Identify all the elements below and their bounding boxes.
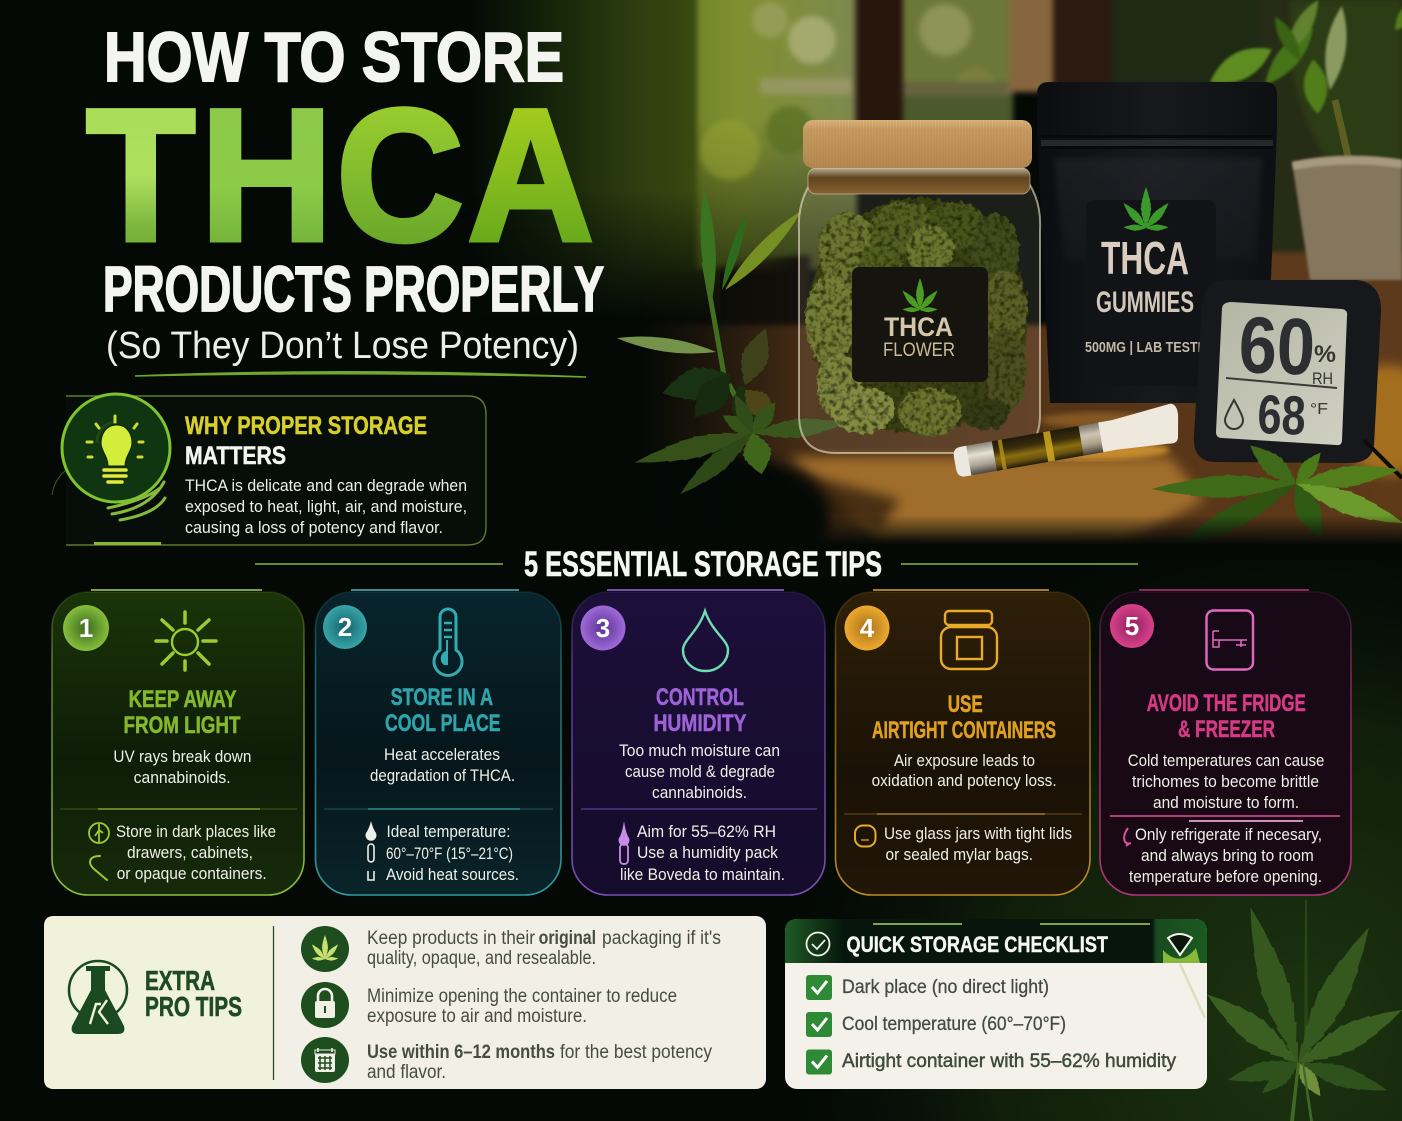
icon: sun (156, 612, 216, 670)
panel: why proper storage matters (52, 394, 486, 545)
heading (385, 684, 500, 737)
storage advice: drawers, cabinets, (127, 843, 253, 862)
heading: KEEP AWAY (129, 686, 237, 713)
panel: tip 4 use airtight containers (836, 590, 1090, 895)
jar label: FLOWER (883, 340, 955, 361)
tip: use within 6-12 months (301, 1037, 712, 1083)
tip: original packaging: Keep products in their (367, 928, 536, 949)
description: degradation of THCA. (370, 766, 515, 785)
check item: dark place (806, 975, 1049, 1000)
storage advice: Store in dark places like (116, 822, 276, 841)
icon: check circle (806, 932, 830, 956)
panel: tip 1 keep away from light (52, 590, 304, 895)
hygrometer: 60% RH, 68°F: % (1314, 341, 1336, 368)
check item: airtight container: Airtight container with 55–62% humidity (842, 1051, 1176, 1072)
foreground cannabis leaf on table (1151, 437, 1402, 560)
number badge 2: 2 (338, 612, 352, 642)
heading: & FREEZER (1178, 716, 1275, 743)
storage advice: Only refrigerate if necesary, (1135, 825, 1322, 844)
heading: AVOID THE FRIDGE (1147, 690, 1306, 717)
description: Too much moisture can (619, 741, 780, 760)
number badge 3: 3 (596, 613, 610, 643)
description (370, 745, 515, 785)
icon: fridge (1206, 610, 1253, 670)
icon: temperature markers (366, 821, 376, 880)
storage advice: temperature before opening. (1129, 867, 1322, 886)
heading: FROM LIGHT (124, 712, 241, 739)
heading: AIRTIGHT CONTAINERS (872, 717, 1056, 744)
title line: THCA (86, 70, 594, 280)
tip: original packaging: quality, opaque, and resealable. (367, 948, 596, 969)
storage advice: or opaque containers. (117, 864, 267, 883)
icon: lightbulb (62, 394, 170, 520)
icon: water drop (683, 611, 728, 671)
plant foliage, top right (1204, 0, 1402, 165)
tip: use within 6-12 months: Use within 6–12 months (367, 1042, 555, 1063)
storage advice (1124, 825, 1322, 886)
checklist header: QUICK STORAGE CHECKLIST (846, 932, 1108, 957)
hygrometer: 60% RH, 68°F: °F (1310, 401, 1328, 418)
title (86, 18, 604, 377)
vape cartridge (951, 403, 1183, 481)
storage advice (89, 822, 276, 883)
hygrometer: 60% RH, 68°F: RH (1312, 369, 1333, 388)
tip: original packaging (301, 926, 721, 972)
storage advice: or sealed mylar bags. (886, 845, 1033, 864)
panel: quick storage checklist (785, 919, 1207, 1089)
title line: THCA: T (86, 70, 195, 280)
number badge 5: 5 (1125, 611, 1139, 641)
heading (654, 684, 746, 737)
left green glow (494, 0, 720, 299)
jar label (852, 267, 988, 382)
section heading: 5 essential storage tips: 5 ESSENTIAL STORAGE TIPS (524, 545, 882, 584)
icon: warning mark (1124, 828, 1131, 846)
description: trichomes to become brittle (1132, 772, 1319, 791)
panel: tip 5 avoid the fridge and freezer (1100, 590, 1351, 895)
icon: jar (941, 611, 997, 669)
jar of THCA flower (799, 120, 1040, 453)
storage advice: Aim for 55–62% RH (637, 822, 776, 841)
window background (697, 0, 1402, 270)
heading (145, 965, 242, 1022)
table plant left of jar (616, 190, 848, 502)
icon: container (855, 826, 876, 846)
text block: causing a loss of potency and flavor. (185, 518, 443, 537)
description: oxidation and potency loss. (872, 771, 1057, 790)
heading: EXTRA (145, 965, 215, 996)
panel: tip 3 control humidity (572, 590, 825, 895)
description: Air exposure leads to (894, 751, 1035, 770)
icon: hook (90, 856, 107, 880)
heading (1147, 690, 1306, 743)
text block: THCA is delicate and can degrade when (185, 476, 467, 495)
description (872, 751, 1057, 790)
heading: CONTROL (656, 684, 744, 711)
subtitle: (So They Don’t Lose Potency) (106, 325, 579, 367)
storage advice: Use glass jars with tight lids (884, 824, 1072, 843)
photo: THCA products on a wooden table (494, 0, 1402, 543)
tip: original packaging: packaging if it's (602, 928, 721, 949)
description: cannabinoids. (134, 768, 231, 787)
pouch: THCA gummies: GUMMIES (1096, 286, 1194, 319)
storage advice: and always bring to room (1141, 846, 1314, 865)
heading (124, 686, 241, 739)
storage advice: 60°–70°F (15°–21°C) (386, 844, 513, 863)
heading: PRO TIPS (145, 991, 242, 1022)
icon: thermometer (434, 609, 462, 675)
heading: HUMIDITY (654, 710, 746, 737)
description: Cold temperatures can cause (1128, 751, 1324, 770)
tip: minimize opening (301, 982, 677, 1028)
title line: THCA: C (336, 70, 464, 280)
number badge 4 (844, 606, 890, 650)
title line: THCA: H (200, 71, 333, 280)
check item: cool temperature (806, 1012, 1066, 1037)
pouch: THCA gummies: 500MG | LAB TESTED (1085, 339, 1215, 356)
description (1128, 751, 1324, 812)
description: cause mold & degrade (625, 762, 775, 781)
heading: WHY PROPER STORAGE (185, 412, 427, 440)
table and window sill (664, 249, 1402, 543)
storage advice (366, 821, 519, 884)
hygrometer: 60% RH, 68°F (1194, 280, 1402, 478)
heading: USE (948, 691, 983, 718)
heading: STORE IN A (391, 684, 493, 711)
icon: flask (69, 961, 127, 1034)
description: cannabinoids. (652, 783, 747, 802)
jar label: THCA (884, 312, 953, 342)
number badge 3 (580, 606, 626, 650)
number badge 1 (63, 605, 109, 651)
description: Heat accelerates (384, 745, 500, 764)
description (113, 747, 251, 787)
check item: cool temperature: Cool temperature (60°–70°F) (842, 1014, 1066, 1035)
storage advice: Avoid heat sources. (386, 865, 519, 884)
buds (805, 198, 1028, 436)
jar neck and lid (803, 120, 1032, 194)
description: and moisture to form. (1153, 793, 1299, 812)
description (619, 741, 780, 802)
storage advice: Ideal temperature: (386, 822, 510, 841)
title line: THCA: A (468, 71, 594, 280)
text block (185, 476, 467, 537)
heading: COOL PLACE (385, 710, 500, 737)
underline swoosh (135, 372, 586, 377)
checklist header (785, 919, 1207, 1018)
text block: exposed to heat, light, air, and moisture, (185, 497, 467, 516)
icon: humidity pack (618, 821, 630, 864)
icon: small leaf badge (89, 823, 109, 843)
icon: shield badge (1163, 934, 1205, 1018)
decorative cannabis leaf, bottom right (1199, 900, 1402, 1121)
storage advice: like Boveda to maintain. (620, 865, 785, 884)
plant pot (1292, 155, 1402, 280)
panel: extra pro tips (44, 916, 766, 1089)
title line: how to store: HOW TO STORE (104, 18, 564, 96)
description: UV rays break down (113, 747, 251, 766)
number badge 1: 1 (79, 613, 93, 643)
number badge 4: 4 (860, 613, 875, 643)
storage advice: Use a humidity pack (637, 843, 778, 862)
heading: MATTERS (185, 442, 286, 470)
hygrometer: 60% RH, 68°F: 68 (1257, 383, 1307, 447)
tip: minimize opening: Minimize opening the container to reduce (367, 986, 677, 1007)
hygrometer: 60% RH, 68°F: 60 (1237, 300, 1316, 392)
icon: leaf (301, 926, 349, 972)
number badge 2 (323, 605, 367, 649)
icon: calendar (301, 1037, 349, 1083)
number badge 5 (1110, 604, 1154, 648)
pouch: THCA gummies (1037, 82, 1277, 403)
storage advice (618, 821, 785, 884)
tip: minimize opening: exposure to air and moisture. (367, 1006, 587, 1027)
tip: use within 6-12 months: for the best potency (560, 1042, 712, 1063)
panel: tip 2 store in a cool place (316, 590, 561, 895)
icon: padlock (301, 982, 349, 1028)
tip: original packaging: original (539, 928, 596, 949)
pouch: THCA gummies: THCA (1101, 232, 1189, 284)
tip: use within 6-12 months: and flavor. (367, 1062, 446, 1083)
storage advice (855, 824, 1072, 864)
title line: products properly: PRODUCTS PROPERLY (103, 253, 604, 325)
check item: dark place: Dark place (no direct light) (842, 977, 1049, 998)
heading (185, 412, 427, 470)
heading (872, 691, 1056, 744)
